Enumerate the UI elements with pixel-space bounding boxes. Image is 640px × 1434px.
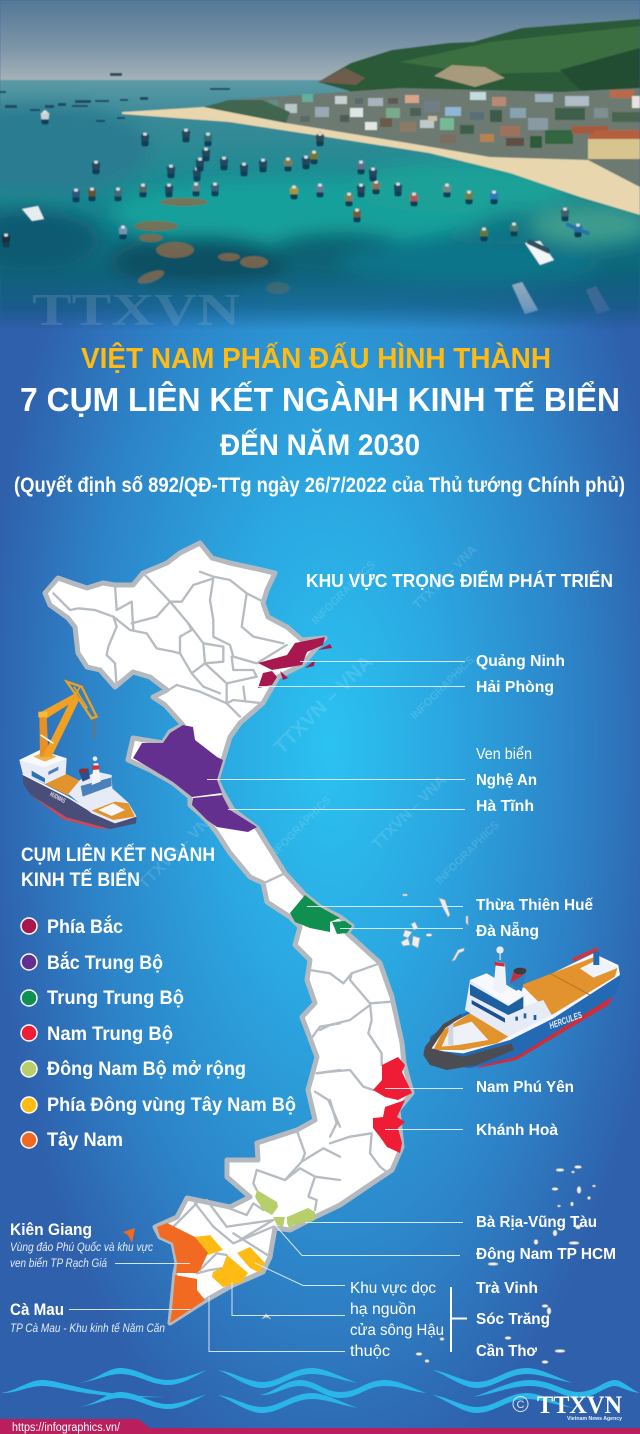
mainland outline [45,543,412,1323]
logo: TTXVN: TTXVN [537,1392,622,1419]
heading: key development areas: KHU VỰC TRỌNG ĐIỂM PHÁT TRIỂN [306,570,613,591]
faint watermarks: INFOGRAPHICS [310,559,378,627]
bracket joining downstream Hậu river provinces [451,1287,467,1352]
faint watermarks: INFOGRAPHICS [142,574,210,642]
photo: fishing boats in a coastal bay [0,0,640,332]
left labels: Kiên Giang: ven biển TP Rạch Giá [10,1258,108,1270]
boats [2,110,582,247]
white boats and small craft [22,206,610,314]
province borders: south [173,1023,340,1273]
heading: marine economy clusters: KINH TẾ BIỂN [21,868,140,891]
legend: Phía Bắc [21,916,123,938]
far boats [0,88,230,122]
right labels: Hải Phòng [476,679,554,696]
region: Quảng Ninh and Hải Phòng [258,637,332,688]
faint watermarks: INFOGRAPHICS [166,697,234,765]
photo watermark: TTXVN [32,285,240,335]
faint watermarks: INFOGRAPHICS [266,794,334,862]
faint watermarks [136,541,502,893]
waves [0,1368,640,1413]
left labels: Cà Mau [10,1301,165,1335]
icon: crane ship [19,682,137,829]
reefs [134,198,290,294]
legend: Đông Nam Bộ mở rộng: Đông Nam Bộ mở rộng [47,1059,246,1080]
right labels: Cần Thơ [476,1343,538,1360]
faint watermarks: INFOGRAPHICS [434,819,502,887]
icon: cargo ship Hercules [423,946,622,1070]
heading: marine economy clusters [21,842,215,891]
footer url: https://infographics.vn/ [12,1422,121,1434]
note: downstream Hậu river area: Khu vực dọc [350,1280,436,1297]
faint watermarks: TTXVN – VNA [410,541,480,612]
right labels: Nghệ An [476,772,537,789]
islands [262,894,596,1364]
title line 1: VIỆT NAM PHẤN ĐẤU HÌNH THÀNH [81,341,551,375]
right labels: Nam Phú Yên [476,1079,574,1096]
map of Vietnam [45,543,596,1364]
ship name: HUDMAS [48,791,67,805]
title [14,341,625,497]
right labels: Đông Nam TP HCM [476,1246,616,1263]
right labels: Bà Rịa-Vũng Tàu [476,1214,597,1231]
ship name: HERCULES [548,1010,584,1031]
legend: Bắc Trung Bộ: Bắc Trung Bộ [47,952,163,974]
region: Trà Vinh, Sóc Trăng, Cần Thơ [195,1235,265,1287]
region: Nam Phú Yên and Khánh Hoà [373,1057,412,1153]
right labels: Hà Tĩnh [476,798,534,815]
region: Kiên Giang and Cà Mau [123,1223,208,1323]
leader lines [69,662,465,1352]
region: Nghệ An and Hà Tĩnh [133,725,257,832]
province borders: central [310,963,392,1173]
province borders: north [53,572,287,883]
village buildings [235,90,640,148]
left labels: Cà Mau: TP Cà Mau - Khu kinh tế Năm Căn [10,1323,165,1335]
logo: TTXVN: Vietnam News Agency [567,1416,623,1422]
note: downstream Hậu river area: cửa sông Hậu [350,1322,444,1339]
heading: marine economy clusters: CỤM LIÊN KẾT NGÀNH [21,842,215,866]
title line 3: ĐẾN NĂM 2030 [220,428,420,462]
note: downstream Hậu river area: thuộc [350,1343,390,1360]
note: downstream Hậu river area [350,1280,444,1360]
title line 2: 7 CỤM LIÊN KẾT NGÀNH KINH TẾ BIỂN [20,381,620,418]
right labels: Khánh Hoà [476,1122,558,1139]
left labels: Cà Mau: Cà Mau [10,1301,64,1319]
right labels: Sóc Trăng [476,1311,550,1328]
region: Thừa Thiên Huế and Đà Nẵng [290,895,352,934]
right labels: Thừa Thiên Huế [476,897,593,914]
legend: Nam Trung Bộ: Nam Trung Bộ [47,1024,173,1045]
faint watermarks: TTXVN – VNA [369,772,450,853]
left labels: Kiên Giang [10,1221,153,1270]
left labels: Kiên Giang: Vùng đảo Phú Quốc và khu vực [10,1242,153,1254]
faint watermarks: TTXVN – VNA [136,807,222,893]
logo: TTXVN [513,1392,623,1422]
right labels: Quảng Ninh [476,653,565,670]
legend: Phía Bắc: Phía Bắc [47,916,123,938]
faint watermarks: INFOGRAPHICS [409,654,477,722]
right labels: Ven biển [476,746,532,763]
legend: Tây Nam: Tây Nam [47,1130,123,1151]
right labels [476,653,616,1360]
left labels: Kiên Giang: Kiên Giang [10,1221,92,1239]
faint watermarks: TTXVN – VNA [270,651,377,759]
right labels: Đà Nẵng [476,920,539,940]
large yellow building on the shore [586,130,640,159]
legend: Trung Trung Bộ: Trung Trung Bộ [47,988,184,1009]
legend [21,916,296,1151]
region: Bà Rịa-Vũng Tàu and Đông Nam TP HCM [255,1190,315,1230]
footer bar [0,1419,640,1434]
right labels: Trà Vinh [476,1280,538,1297]
note: downstream Hậu river area: hạ nguồn [350,1301,416,1318]
logo: TTXVN: C [517,1399,525,1411]
legend: Phía Đông vùng Tây Nam Bộ: Phía Đông vùng Tây Nam Bộ [47,1095,296,1116]
